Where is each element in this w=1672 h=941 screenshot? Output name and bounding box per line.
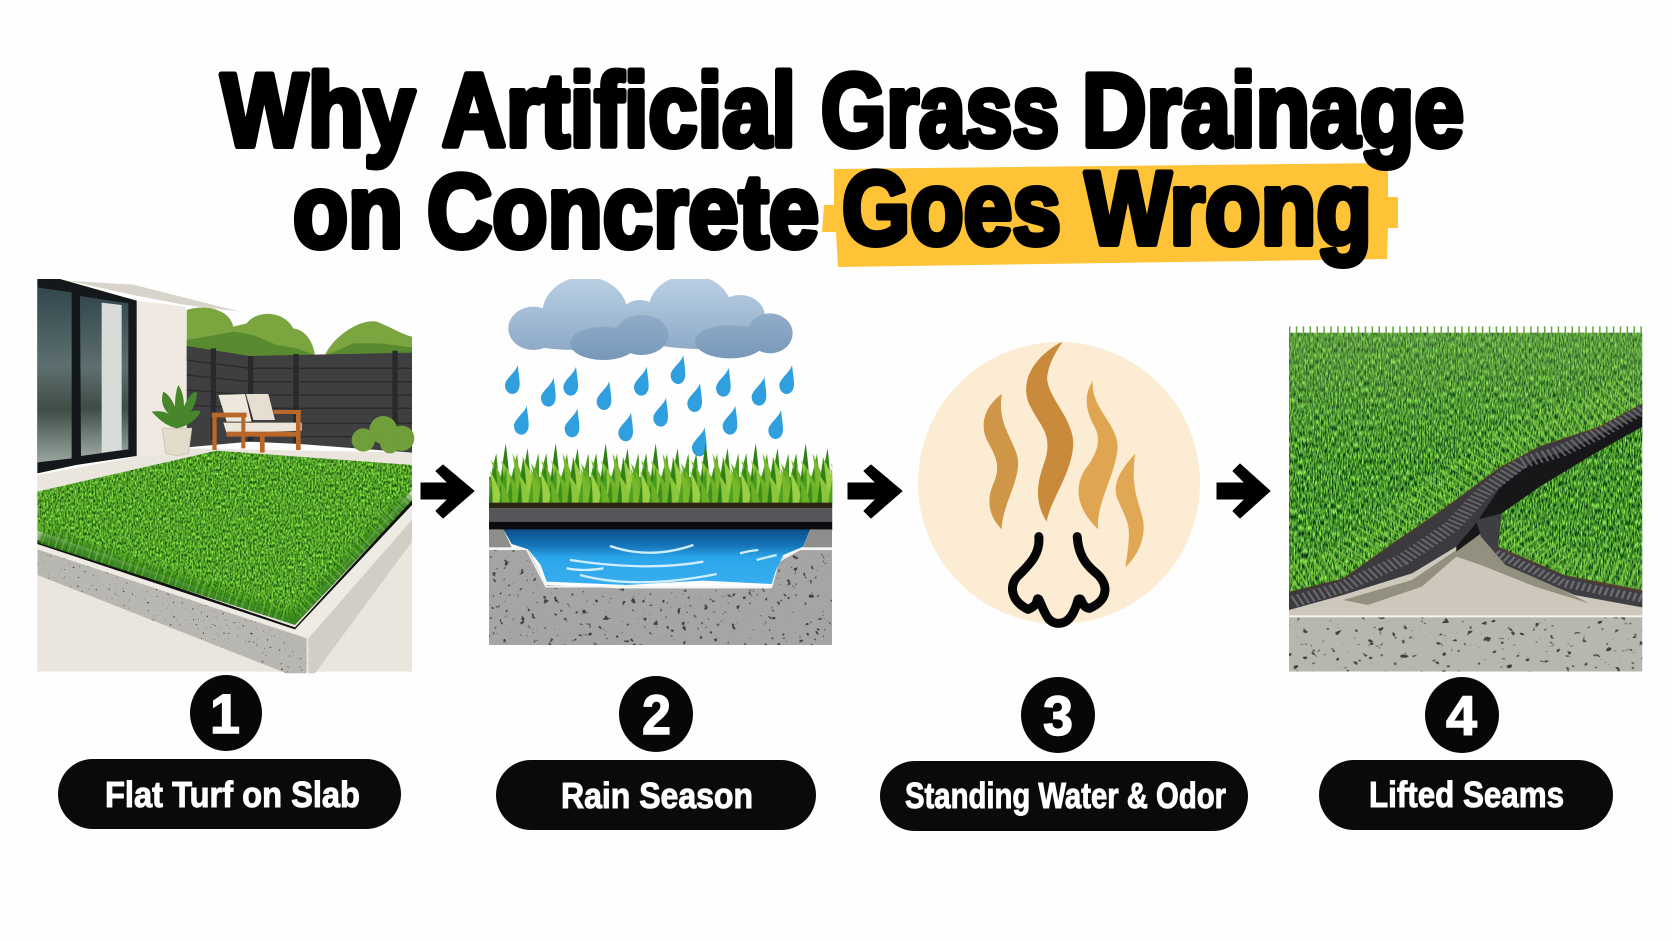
potted plant (152, 385, 201, 455)
turf backing layers (489, 503, 832, 530)
nose icon (1012, 537, 1105, 623)
arrow 2 (848, 465, 902, 518)
pill text 2: Rain Season (561, 775, 753, 816)
dark cloud base (570, 313, 793, 360)
slab lip (37, 505, 412, 638)
ground (37, 448, 412, 672)
house wall (137, 301, 186, 457)
title word: Goes: Goes (842, 151, 1061, 267)
seam gap shadow (1456, 400, 1642, 552)
turf top (37, 447, 414, 627)
sand concrete surface (1289, 520, 1642, 618)
panel 4: lifted seams illustration (1289, 327, 1643, 672)
highlight swash behind Goes Wrong (822, 163, 1398, 267)
step 4 label (1319, 677, 1613, 830)
number badge 1 (190, 675, 262, 751)
slab lip (1289, 615, 1642, 617)
panel 1: flat turf on slab illustration (37, 279, 414, 677)
title word: Wrong: Wrong (1085, 151, 1372, 267)
number 1: 1 (210, 682, 240, 745)
title word: Grass: Grass (821, 53, 1059, 169)
right turf backing (1476, 513, 1642, 607)
slab front face (37, 543, 311, 677)
arrow 1 (421, 465, 474, 518)
number badge 2 (619, 676, 693, 752)
number 2: 2 (642, 683, 671, 746)
arrow 3 (1217, 464, 1270, 518)
step 2 label (496, 676, 816, 830)
step 3 label (880, 677, 1248, 831)
shrub (352, 416, 414, 453)
number 4: 4 (1446, 684, 1477, 747)
pill text 1: Flat Turf on Slab (105, 774, 360, 815)
standing water (503, 529, 810, 585)
panel 2: rain season illustration (489, 275, 832, 647)
step 1 label (58, 675, 401, 829)
concrete slab (489, 547, 832, 647)
number 3: 3 (1043, 684, 1073, 747)
slab highlight line (489, 549, 832, 587)
pill 4 (1319, 760, 1613, 830)
panel 3: odor icon (918, 342, 1200, 624)
roof (68, 281, 240, 312)
pill text 4: Lifted Seams (1369, 774, 1564, 815)
fence (187, 346, 412, 453)
pill 1 (58, 759, 401, 829)
main turf backing (1289, 403, 1642, 610)
front-left cloud (508, 277, 633, 350)
turf backing strip (37, 500, 412, 629)
title word: Artificial: Artificial (442, 53, 796, 169)
trees (187, 307, 412, 360)
shadow under lifted turf (1343, 533, 1589, 605)
raindrops (505, 355, 794, 456)
concrete face (1289, 617, 1642, 672)
infographic canvas (37, 68, 1642, 831)
pill 2 (496, 760, 816, 830)
turf top fringe (1289, 326, 1642, 335)
slab right face (308, 520, 412, 673)
concrete shoulders (489, 529, 832, 547)
cream circle (918, 342, 1200, 624)
odor wisps (984, 342, 1144, 567)
bench (212, 394, 302, 453)
right turf (1491, 423, 1643, 593)
main turf (1289, 327, 1642, 597)
number badge 3 (1021, 677, 1095, 753)
title word: Drainage: Drainage (1082, 53, 1464, 169)
number badge 4 (1425, 677, 1499, 753)
sliding door (37, 279, 137, 473)
pill 3 (880, 761, 1248, 831)
title (221, 53, 1464, 270)
title word: on: on (293, 154, 403, 270)
pill text 3: Standing Water & Odor (905, 775, 1226, 816)
turf edge blades (37, 492, 412, 625)
rear cloud (626, 279, 765, 349)
title word: Why: Why (221, 53, 415, 169)
title word: Concrete: Concrete (427, 154, 819, 270)
grass layer (489, 439, 832, 503)
